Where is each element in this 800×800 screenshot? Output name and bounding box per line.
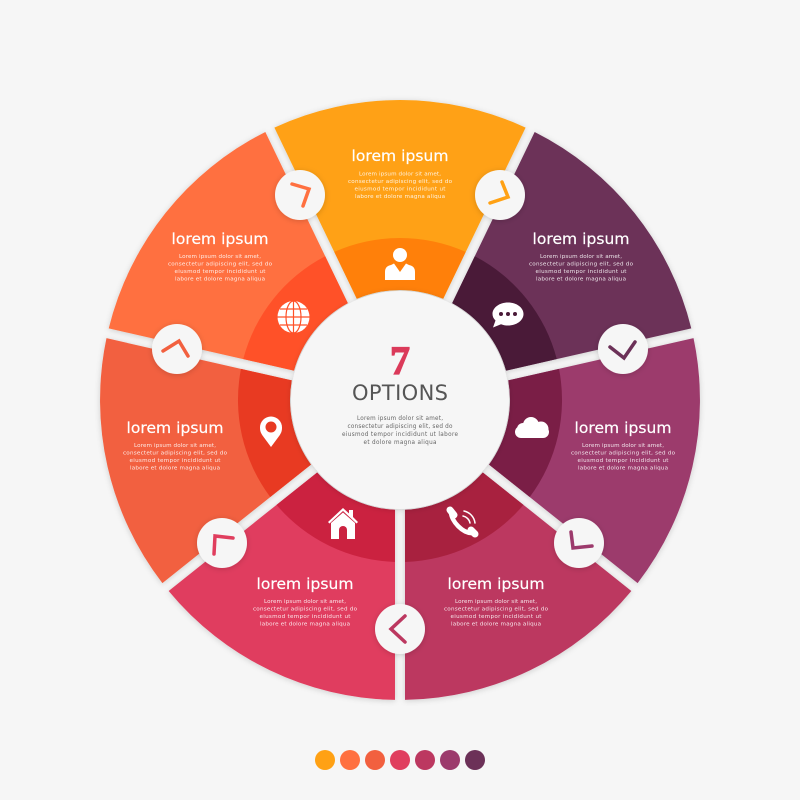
arrow node: top left [275, 170, 325, 220]
arrow node: bottom [375, 604, 425, 654]
legend dots [315, 750, 485, 770]
text block: right option: consectetur adipiscing elit, sed do [571, 450, 676, 456]
text block: right option [571, 443, 676, 472]
icon: globe [278, 301, 310, 333]
icon: person [385, 248, 415, 280]
text block: lower left option: labore et dolore magna aliqua [260, 622, 350, 628]
text block: top option: Lorem ipsum dolor sit amet, [359, 172, 441, 178]
center text block: eiusmod tempor incididunt ut labore [342, 432, 458, 438]
text block: upper left option [168, 254, 273, 282]
text block: top option [348, 172, 453, 200]
arrow node: left lower [197, 518, 247, 568]
icon: cloud [515, 417, 549, 438]
text block: right option: Lorem ipsum dolor sit amet, [582, 443, 664, 449]
arrow node: right upper [598, 324, 648, 374]
panel: upper left option [87, 115, 399, 435]
text block: top option: consectetur adipiscing elit, sed do [348, 179, 453, 185]
text block: upper right option: labore et dolore magna aliqua [536, 276, 626, 282]
icon: house [328, 508, 358, 539]
text block: lower left option: Lorem ipsum dolor sit amet, [264, 599, 346, 605]
icon: speech bubble [492, 302, 524, 328]
text block: lower left option: eiusmod tempor incididunt ut [260, 614, 351, 620]
panel: right option [471, 300, 720, 589]
text block: left option: consectetur adipiscing elit, sed do [123, 450, 228, 456]
text block: lower left option [253, 599, 358, 628]
text block: upper right option [529, 254, 634, 282]
text block: lower left option: consectetur adipiscing elit, sed do [253, 606, 358, 612]
arrow node: right lower [554, 518, 604, 568]
heading: lower right option: lorem ipsum [448, 575, 544, 593]
text block: left option: Lorem ipsum dolor sit amet, [134, 443, 216, 449]
text block: left option: labore et dolore magna aliqua [130, 466, 220, 472]
center text block [342, 416, 458, 446]
panel: center circle [291, 291, 509, 509]
panel: lower right option [331, 437, 643, 725]
arrow node: top right [475, 170, 525, 220]
text block: upper right option: eiusmod tempor incididunt ut [536, 269, 627, 275]
panel: top option [274, 100, 526, 299]
text block: top option: eiusmod tempor incididunt ut [354, 186, 446, 192]
heading: lower left option: lorem ipsum [256, 575, 354, 593]
text block: lower right option: consectetur adipiscing elit, sed do [444, 606, 549, 612]
heading: left option: lorem ipsum [126, 419, 224, 437]
heading: right option: lorem ipsum [574, 419, 672, 437]
text block: lower right option: labore et dolore magna aliqua [451, 622, 541, 628]
center heading: OPTIONS [352, 381, 448, 405]
center number: 7 [390, 338, 410, 383]
text block: upper right option: consectetur adipiscing elit, sed do [529, 262, 634, 268]
heading: upper left option: lorem ipsum [172, 230, 268, 248]
text block: left option [123, 443, 228, 472]
text block: lower right option: eiusmod tempor incididunt ut [450, 614, 542, 620]
text block: right option: labore et dolore magna aliqua [578, 466, 668, 472]
center text block: consectetur adipiscing elit, sed do [348, 424, 453, 430]
center text block: et dolore magna aliqua [364, 440, 436, 446]
arrow node: left upper [152, 324, 202, 374]
text block: upper left option: consectetur adipiscing elit, sed do [168, 262, 273, 268]
center text block: Lorem ipsum dolor sit amet, [357, 416, 443, 422]
text block: lower right option: Lorem ipsum dolor sit amet, [455, 599, 537, 605]
heading: top option: lorem ipsum [352, 147, 448, 165]
icon: phone [450, 510, 475, 534]
text block: top option: labore et dolore magna aliqua [355, 194, 445, 200]
icon: location pin [260, 416, 282, 447]
text block: upper left option: eiusmod tempor incididunt ut [174, 269, 266, 275]
panel: lower left option [157, 437, 469, 725]
text block: lower right option [444, 599, 549, 628]
text block: upper right option: Lorem ipsum dolor sit amet, [540, 254, 622, 260]
panel: left option [80, 300, 329, 589]
text block: upper left option: Lorem ipsum dolor sit amet, [179, 254, 261, 260]
panel: upper right option [401, 115, 713, 435]
heading: upper right option: lorem ipsum [532, 230, 630, 248]
text block: right option: eiusmod tempor incididunt ut [578, 458, 669, 464]
text block: left option: eiusmod tempor incididunt ut [130, 458, 221, 464]
text block: upper left option: labore et dolore magna aliqua [175, 276, 265, 282]
